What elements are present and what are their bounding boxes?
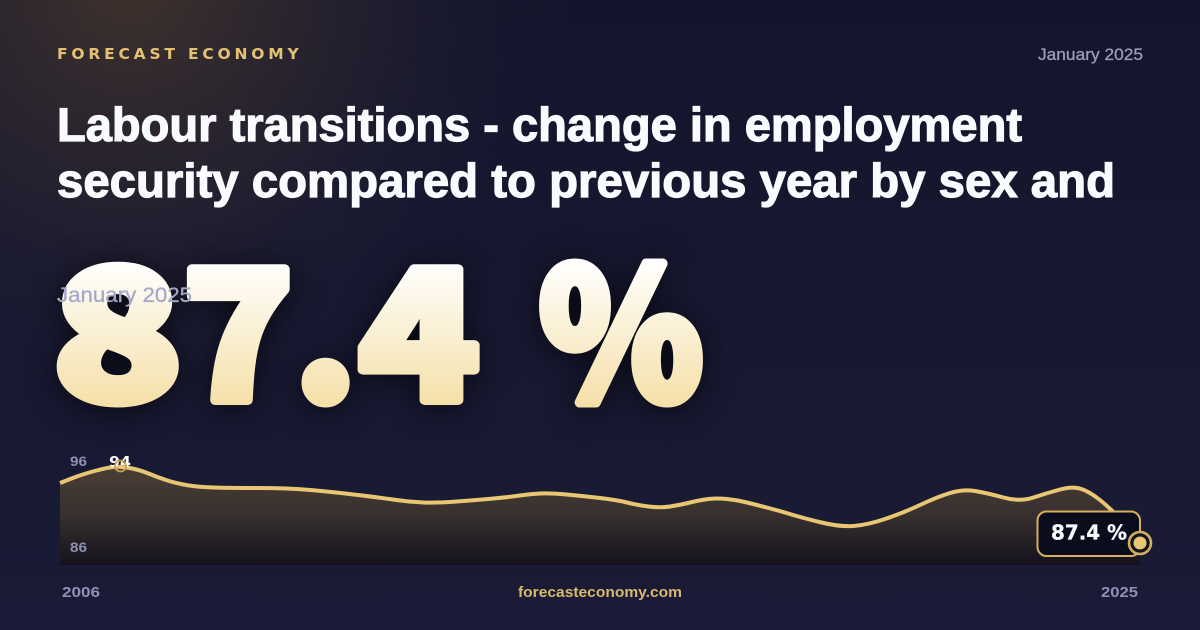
date top right: January 2025: [1038, 46, 1143, 64]
big value: 7: [183, 192, 293, 453]
big value: 4: [359, 193, 479, 452]
title: Labour transitions - change in employment: [57, 98, 1022, 151]
current value callout: 87.4 %: [1051, 520, 1127, 544]
y axis min label: 86: [70, 539, 87, 555]
title: [57, 98, 1115, 207]
end point marker: [1129, 532, 1151, 554]
chart line: [60, 467, 1140, 543]
big value: .: [294, 191, 357, 452]
y axis max label: 96: [70, 453, 87, 469]
peak value label: 94: [109, 453, 131, 471]
peak marker: [115, 460, 126, 472]
big value: 8: [52, 192, 183, 452]
brand label: FORECAST ECONOMY: [57, 45, 303, 63]
line chart: [60, 453, 1151, 565]
current value callout: [1038, 512, 1140, 556]
source website: forecasteconomy.com: [518, 584, 682, 601]
x axis start year: 2006: [62, 584, 100, 601]
title: security compared to previous year by sex and: [57, 154, 1115, 207]
chart area fill: [60, 467, 1140, 565]
big value: %: [539, 191, 703, 452]
overlapping date label: January 2025: [57, 284, 192, 307]
x axis end year: 2025: [1101, 584, 1138, 601]
big value: [52, 191, 703, 453]
